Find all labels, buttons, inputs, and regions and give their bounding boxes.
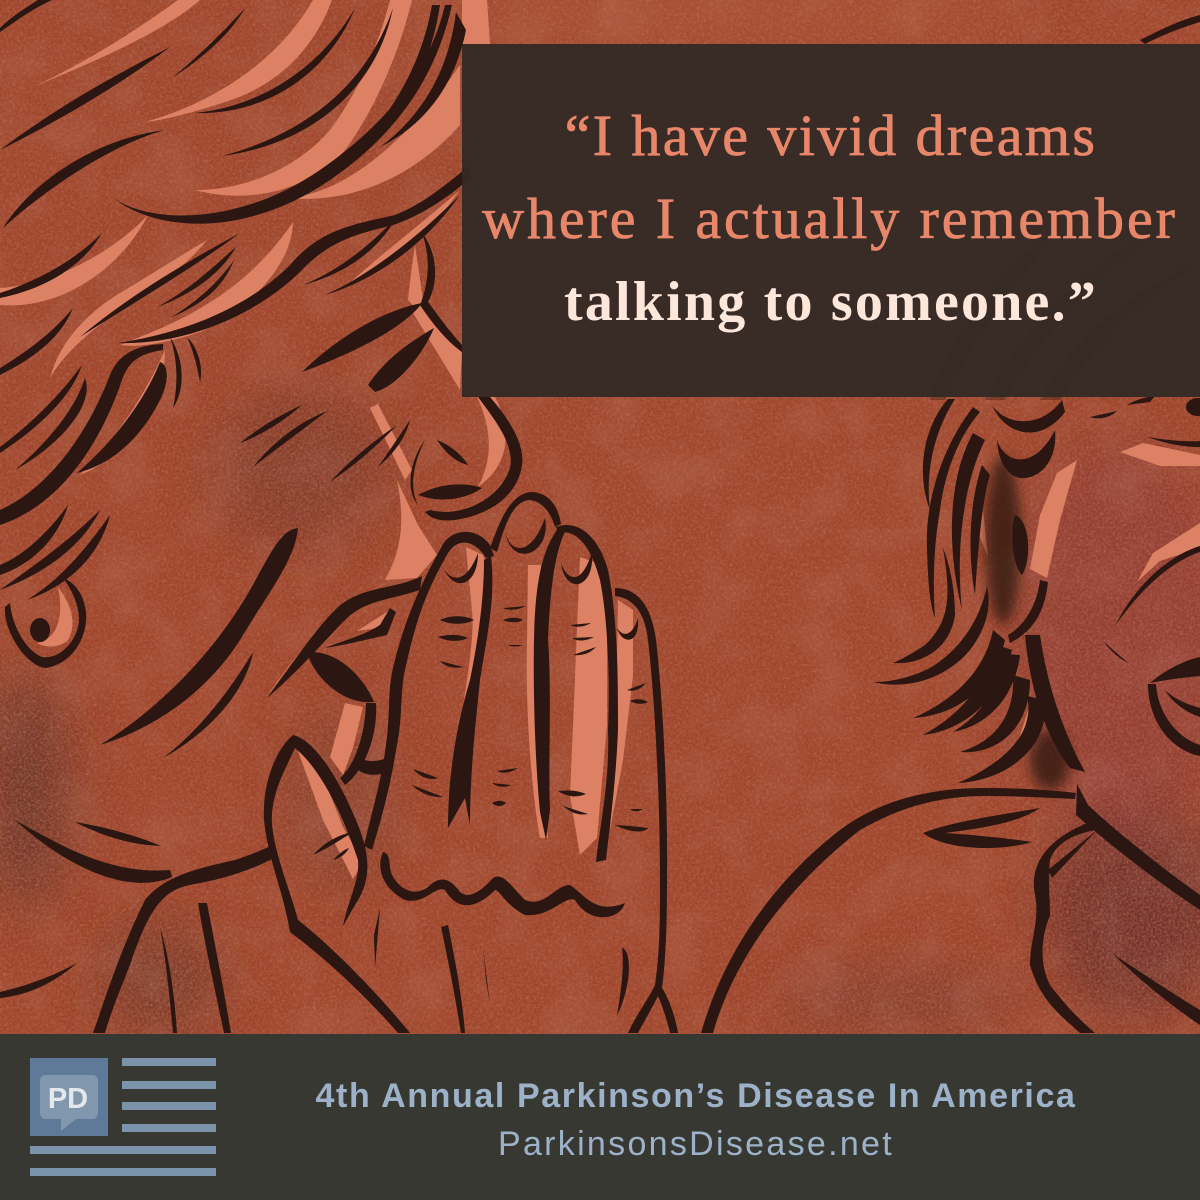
thumb and collar — [93, 735, 410, 1033]
jaw and neck — [0, 528, 298, 998]
illustration: peach highlights — [0, 0, 1200, 879]
quote: line 2: where I actually remember — [482, 186, 1178, 251]
face highlights — [37, 245, 506, 775]
hair strokes — [873, 399, 1085, 783]
icon: PD logo flag — [30, 1058, 216, 1176]
shoulder and collar — [701, 784, 1200, 1033]
quote: line 3: talking to someone.” — [564, 271, 1098, 333]
second woman highlights — [977, 443, 1200, 771]
quote: line 1: “I have vivid dreams — [565, 103, 1097, 168]
hand highlights — [298, 547, 633, 879]
illustration: woman whispering, ink lines — [0, 0, 678, 1033]
knuckle lines — [412, 606, 648, 831]
dark hair wash — [985, 455, 1070, 790]
footer title: 4th Annual Parkinson’s Disease In America — [316, 1077, 1076, 1115]
footer bar — [0, 1034, 1200, 1200]
eye, cheek and mouth — [1090, 396, 1200, 756]
palm lines — [374, 852, 629, 1033]
illustration: listening woman, ink lines — [701, 15, 1200, 1033]
earring — [5, 578, 86, 668]
hand fingers — [364, 492, 678, 1033]
footer url: ParkinsonsDisease.net — [498, 1125, 894, 1163]
hair highlights — [0, 0, 490, 475]
mouth and lips — [267, 576, 422, 785]
hair above the box — [930, 15, 1200, 400]
face and brow strokes — [240, 233, 522, 521]
hair strokes — [0, 0, 470, 600]
panel: quote box — [462, 44, 1200, 397]
icon: PD logo flag: PD — [48, 1083, 88, 1115]
